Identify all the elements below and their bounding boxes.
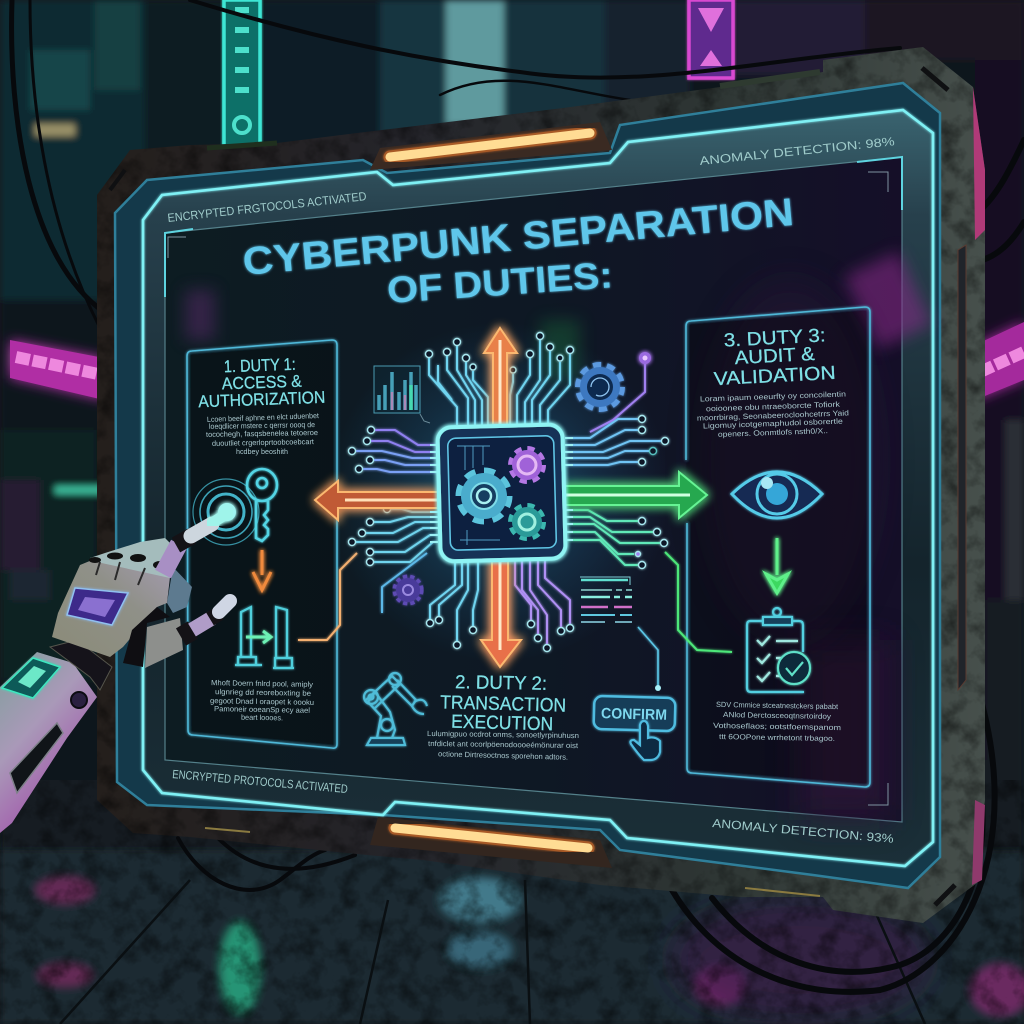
neon sign: pink right: [975, 322, 1024, 400]
duty 3 intro text: Loram ipaum oeeurfty oy concoilentin: [700, 389, 846, 404]
duty 1 lower text: gegoot Dnad l oraopet k oooku: [210, 696, 314, 707]
duty 3 lower text: Vothoseflaos; ootstfoemspanom: [713, 721, 841, 732]
duty 1 heading: AUTHORIZATION: [198, 388, 326, 411]
icon: pointer hand: [630, 721, 660, 760]
panel: outer metal frame: [97, 47, 985, 923]
neon sign: teal vertical: [224, 0, 260, 148]
mini chart: [374, 366, 430, 423]
circuit traces: top: [426, 332, 574, 425]
icon: touch target rings: [193, 479, 259, 545]
icon: blue gear: [578, 365, 622, 409]
duty 2 heading: [440, 672, 566, 735]
neon border line: [143, 110, 933, 866]
arrow: up orange: [484, 328, 517, 425]
status text: bottom right: ANOMALY DETECTION: 93%: [712, 816, 895, 846]
chip glow: [330, 322, 670, 662]
gear: blue teal: [459, 471, 509, 521]
chip pads: [430, 438, 573, 542]
duty 2 heading: EXECUTION: [451, 712, 553, 735]
duty 3 heading: AUDIT &: [734, 344, 816, 369]
data list: [580, 577, 632, 622]
panel: duty 1: [187, 340, 337, 748]
duty 3 lower text: [713, 700, 841, 743]
robot hand and arm: [0, 513, 230, 833]
status text: top left: ENCRYPTED FRGTOCOLS ACTIVATED: [167, 189, 367, 225]
duty 2 heading: 2. DUTY 2:: [455, 672, 547, 695]
panel: glass bezel: [115, 83, 940, 888]
duty 3 intro text: openers. Oonmtlofs nsth0/X..: [718, 426, 828, 439]
icon: orange down arrow: [253, 550, 271, 590]
palm side: [167, 567, 192, 613]
duty 3 intro text: ooioonee obu ntraeoborcte Tofiork: [706, 400, 840, 413]
neon sign: pink vertical: [689, 0, 733, 78]
duty 1 lower text: Mhoft Doern fnlrd pool, amiply: [211, 678, 313, 689]
circuit traces: bottom: [426, 560, 574, 652]
orange light bar: bottom: [370, 817, 612, 868]
duty 1 intro text: duoutliet crgerloprtoobcoebcart: [212, 437, 315, 448]
chip: [430, 424, 573, 562]
status text: bottom left: ENCRYPTED PROTOCOLS ACTIVATED: [172, 767, 349, 796]
dark palm: [123, 607, 170, 667]
duty 2 body text: tnfdiclet ant ocorlpöenodoooeémönurar oist: [428, 739, 579, 750]
icon: clipboard with check: [747, 608, 810, 692]
confirm button: CONFIRM: [601, 705, 667, 724]
icon: eye: [732, 472, 822, 518]
confirm button: [594, 696, 675, 731]
duty 1 intro text: hcdbey beoshith: [236, 447, 288, 456]
duty 3 lower text: SDV Cmmice stceatnestckers pababt: [716, 700, 839, 711]
duty 1 intro text: Lcoen beeif aphne en elct uduenbet: [207, 411, 320, 424]
gear: purple: [511, 449, 543, 481]
duty 2 heading: TRANSACTION: [440, 692, 566, 717]
icon: green down arrow: [766, 538, 788, 593]
icon: key: [247, 469, 277, 541]
duty 1 intro text: loeqdlicer mstere c qerrsr oooq de: [209, 420, 315, 431]
circuit traces: left: [348, 426, 438, 613]
duty 3 heading: [713, 325, 836, 390]
duty 3 lower text: ANlod Derctosceoqtnsrtoirdoy: [723, 710, 831, 721]
connector: orange: [298, 553, 357, 640]
back of hand: [52, 538, 172, 657]
status text: top right: ANOMALY DETECTION: 98%: [699, 134, 896, 168]
wet ground texture: [0, 780, 1024, 1024]
duty 1 lower text: ulgnrieg dd reoreboxting be: [215, 687, 311, 698]
wrist joint: [50, 640, 112, 690]
connector: green: [665, 552, 732, 652]
duty 2 body text: [427, 729, 579, 762]
duty 3 heading: 3. DUTY 3:: [723, 325, 826, 352]
duty 1 lower text: [210, 678, 314, 722]
index finger: [163, 513, 228, 574]
duty 3 intro text: [697, 389, 849, 439]
circuit traces: right: [565, 358, 668, 568]
duty 3 lower text: ttt 6OOPone wrrhetont trbagoo.: [719, 732, 835, 743]
title: CYBERPUNK SEPARATION: [241, 191, 796, 284]
duty 2 body text: Lulumigpuo ocdrot onms, sonoetlyrpinuhusn: [427, 729, 579, 740]
panel: duty 3: [686, 307, 870, 787]
neon sign: pink left: [10, 340, 104, 400]
duty 3 intro text: moorrbirag, Seonabeerocloohcetrrs Yaid: [697, 408, 849, 423]
connector: confirm line: [638, 627, 661, 691]
thumb: [145, 601, 230, 668]
duty 1 intro text: tocochegh, fasqsbenelea tetoeroe: [206, 428, 318, 439]
duty 1 lower text: Pamoneir ooeanSp ecy aael: [214, 704, 310, 715]
duty 1 heading: ACCESS &: [222, 372, 303, 393]
duty 3 intro text: Ligomuy icotgemaphudol osborertle: [703, 417, 843, 430]
icon: gate with arrow: [235, 607, 294, 668]
forearm: [0, 652, 97, 833]
title: [241, 191, 796, 311]
duty 1 intro text: [206, 411, 320, 456]
duty 1 heading: [198, 355, 326, 411]
icon: robot arm: [364, 673, 427, 745]
arrow: down orange: [481, 560, 521, 667]
duty 3 heading: VALIDATION: [713, 363, 836, 390]
duty 1 heading: 1. DUTY 1:: [223, 355, 296, 376]
duty 1 lower text: beart loooes.: [241, 713, 283, 722]
panel: glass screen: [143, 110, 933, 866]
panel: inner dark display: [165, 157, 932, 822]
icon: purple gear: [395, 577, 421, 603]
title: OF DUTIES:: [386, 254, 614, 311]
orange light bar: top: [370, 122, 612, 170]
arrow: left orange: [315, 481, 438, 520]
duty 2 body text: octione Dirtresoctnos sporehon adtors.: [438, 749, 568, 762]
arrow: right green: [565, 472, 707, 518]
icon: purple spark: [639, 352, 651, 364]
gear: green: [511, 506, 543, 538]
